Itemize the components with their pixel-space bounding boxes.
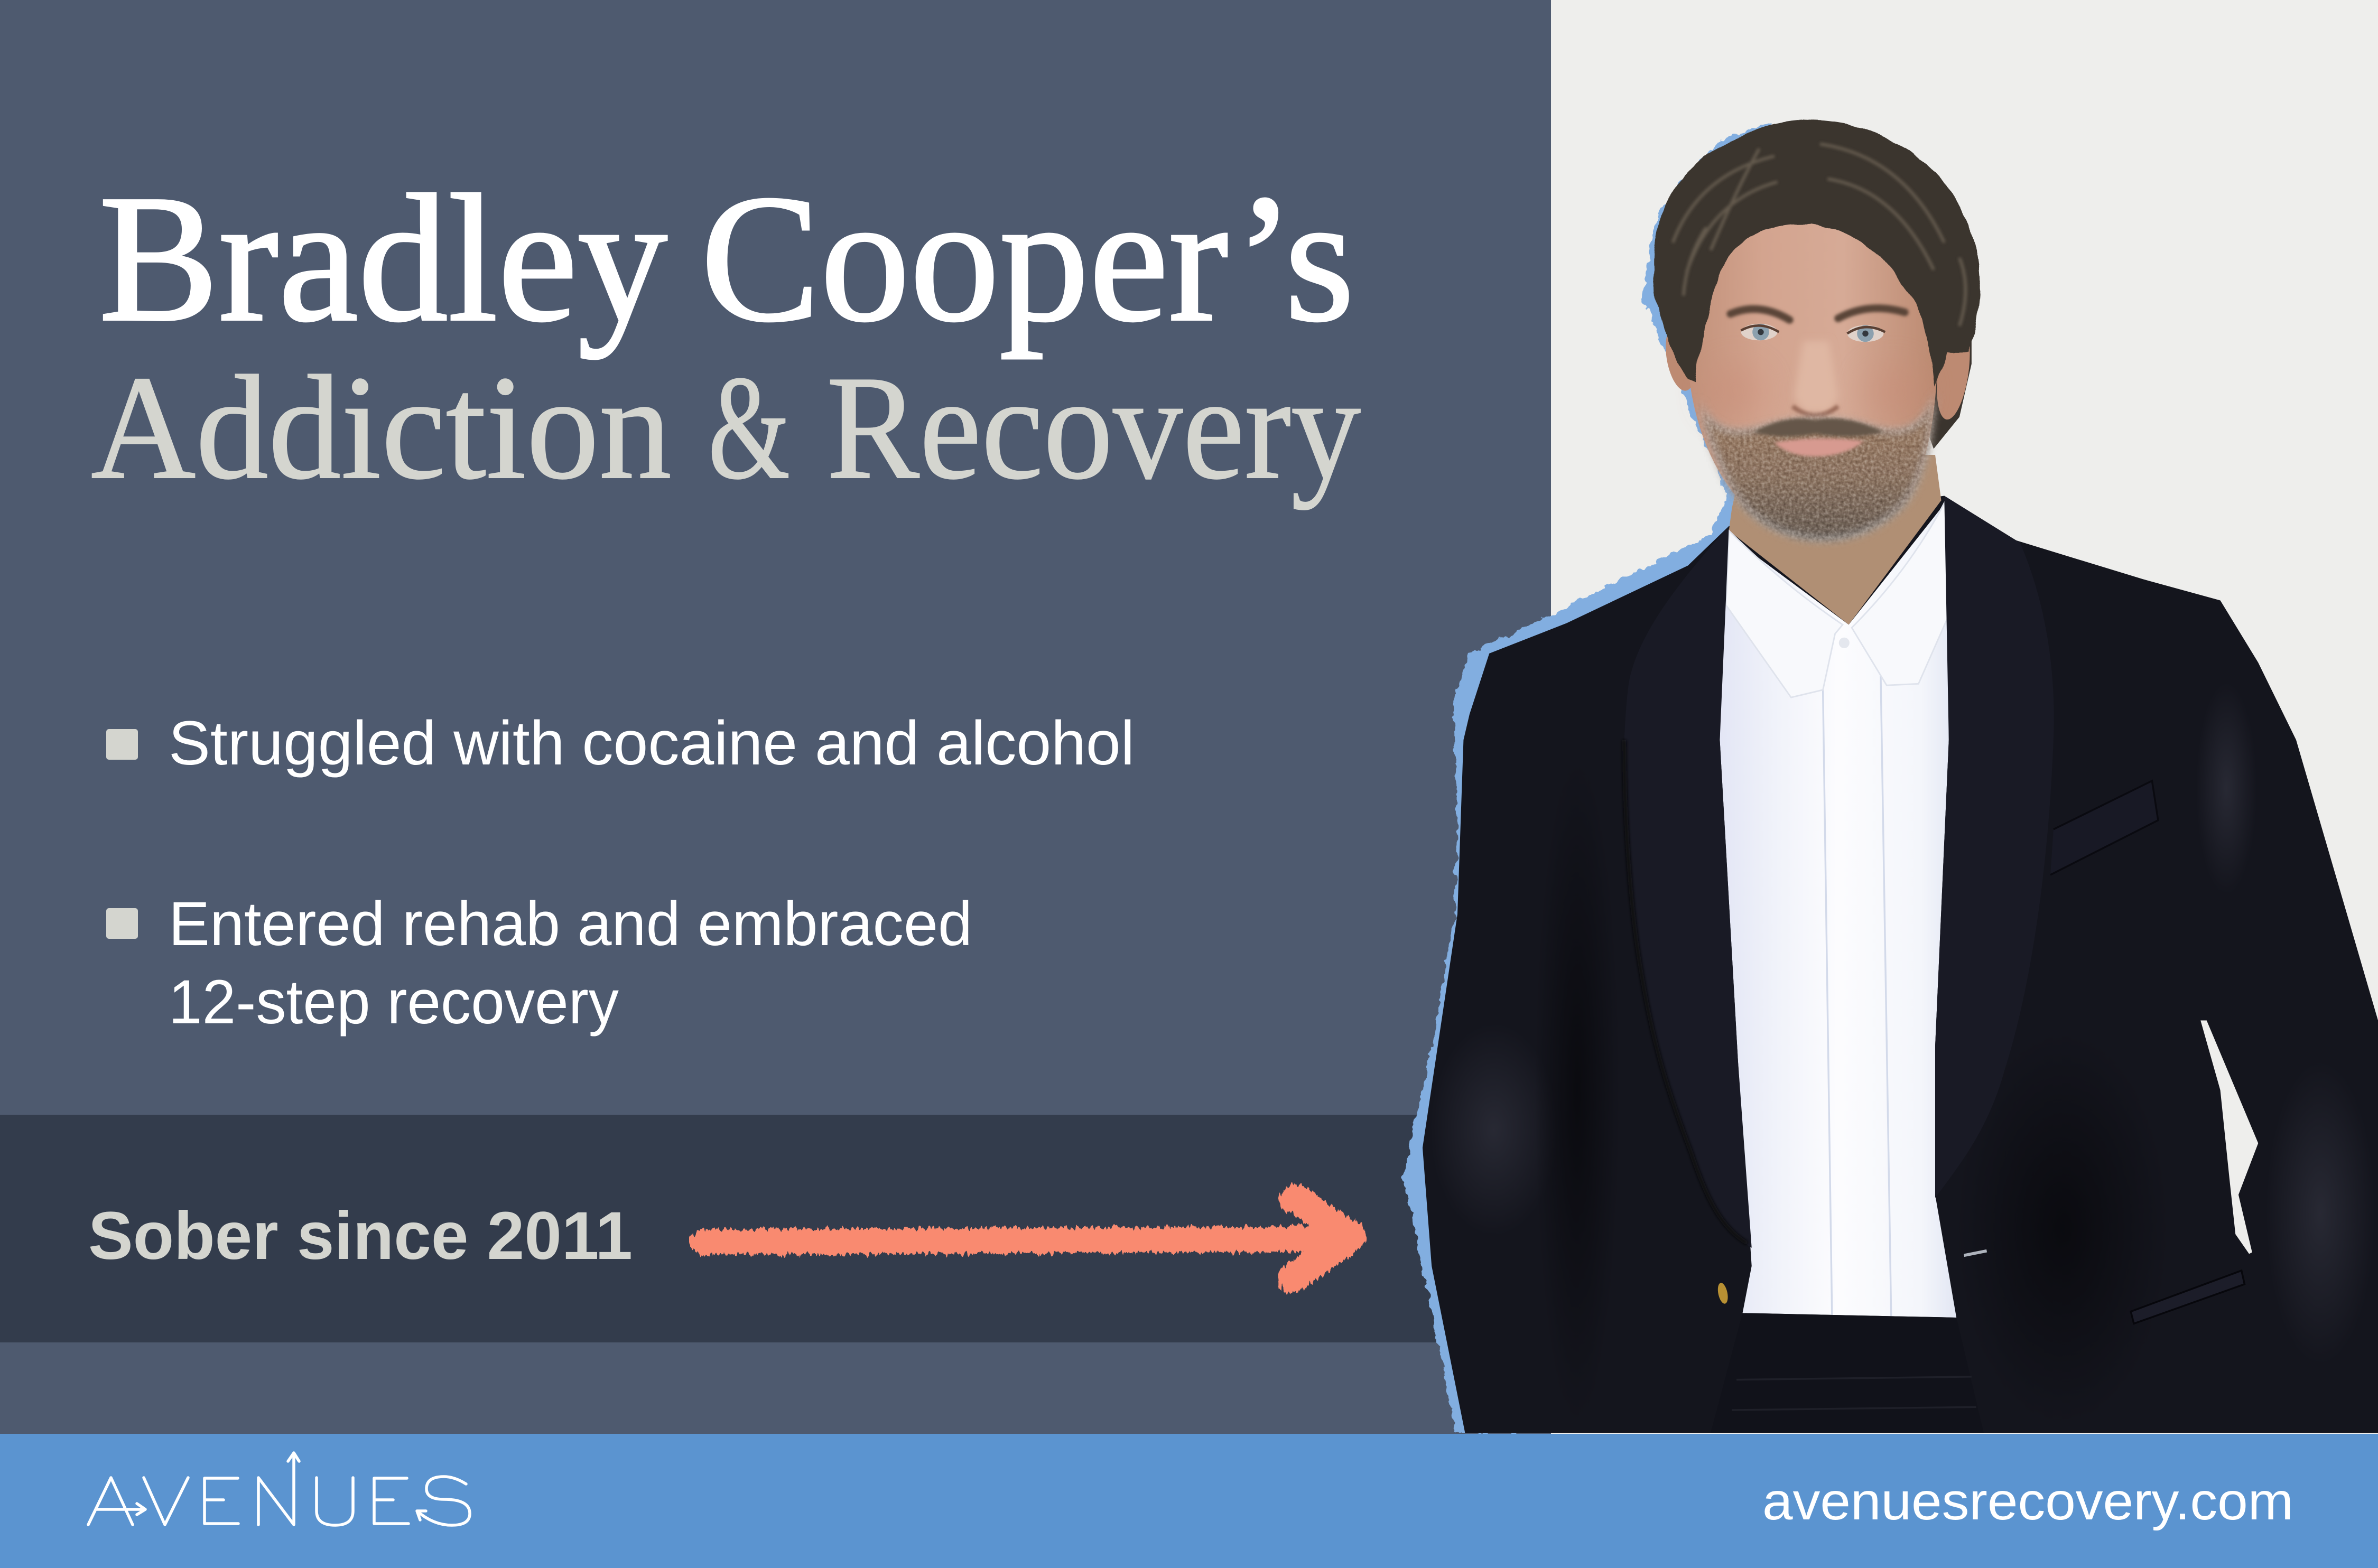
background gap between arm and torso	[2200, 1020, 2258, 1254]
hair	[1654, 120, 1980, 387]
bullet text 1: Struggled with cocaine and alcohol	[169, 708, 1135, 778]
buttonhole	[1964, 1251, 1987, 1255]
eyebrows	[1731, 308, 1905, 320]
bullet square 1	[106, 729, 138, 760]
website url: avenuesrecovery.com	[1762, 1472, 2293, 1531]
chest pocket	[2050, 781, 2158, 875]
logo letter V	[144, 1478, 188, 1525]
moustache	[1753, 418, 1883, 436]
logo letter U	[317, 1478, 353, 1525]
footer bar	[0, 1434, 2378, 1568]
shirt	[1720, 500, 1956, 1318]
jacket lapels	[1624, 496, 2054, 1248]
photo: man in dark suit cut-out	[1403, 120, 2378, 1433]
panel: slate left panel	[0, 0, 1551, 1434]
waistband folds	[1732, 1377, 1976, 1410]
subtitle: Addiction & Recovery: Recovery	[826, 345, 1361, 510]
title: Bradley Cooper's: Cooper’s	[701, 157, 1354, 359]
shirt placket	[1823, 667, 1891, 1316]
title: Bradley Cooper's: Bradley	[99, 157, 667, 359]
lapel edge shadow	[1624, 740, 1747, 1243]
nose	[1792, 341, 1838, 415]
gold jacket button	[1716, 1282, 1730, 1304]
blue torn paper halo	[1403, 122, 1835, 1433]
bullet square 2	[106, 908, 138, 939]
bullet text 2: 12-step recovery	[169, 967, 619, 1037]
suit jacket	[1423, 496, 2378, 1433]
logo letter N	[258, 1453, 299, 1525]
eyes	[1741, 324, 1885, 342]
logo: Avenues with arrows	[88, 1453, 470, 1525]
subtitle: Addiction & Recovery: Addiction	[91, 345, 672, 510]
bullet text 2: Entered rehab and embraced	[169, 889, 972, 959]
lips	[1775, 438, 1864, 456]
face	[1688, 197, 1938, 535]
cheek blush	[1709, 367, 1920, 415]
sober since label: Sober since 2011	[88, 1198, 633, 1274]
beard	[1698, 391, 1935, 540]
subtitle: Addiction & Recovery: &	[708, 345, 790, 510]
panel: dark sobriety band	[0, 1115, 1480, 1342]
neck	[1729, 455, 1941, 624]
bullet list	[106, 708, 1135, 1037]
logo letter A	[88, 1478, 145, 1525]
logo letter E	[205, 1478, 238, 1524]
arrow: coral chalk arrow	[704, 1198, 1351, 1278]
shirt collar	[1726, 497, 1947, 697]
hip pocket	[2131, 1271, 2244, 1323]
logo letter E	[374, 1478, 408, 1524]
logo letter S	[417, 1477, 470, 1525]
waistband	[1711, 1313, 1984, 1433]
hair highlights	[1673, 144, 1965, 326]
hair back	[1914, 273, 1972, 449]
suit sheen and shading	[1430, 682, 2375, 1425]
ears	[1661, 321, 1975, 422]
